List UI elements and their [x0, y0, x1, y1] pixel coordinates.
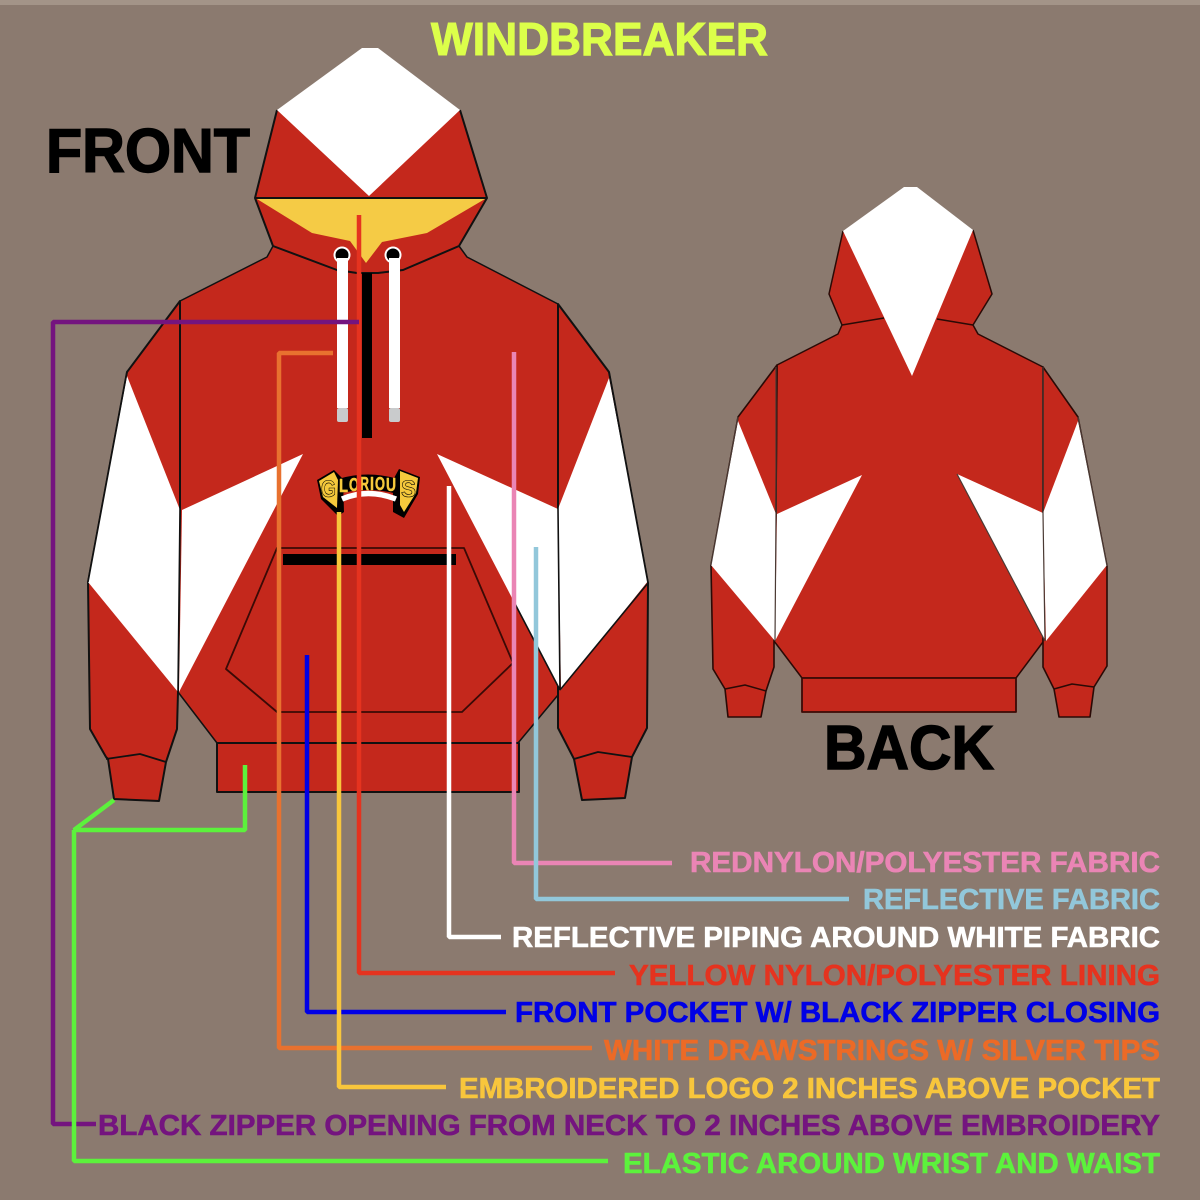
line: green: [74, 765, 245, 830]
embroidered logo: G: [321, 476, 336, 503]
left sleeve: [88, 301, 180, 801]
line: pink: [514, 352, 672, 863]
embroidered logo: R: [360, 474, 369, 494]
drawstring left: [337, 258, 348, 422]
embroidered logo: [317, 469, 420, 518]
heading: front: FRONT: [46, 117, 250, 186]
pocket: [226, 548, 513, 712]
right sleeve white panel: [558, 378, 648, 690]
callout lines: [53, 215, 849, 1161]
right body white panel: [437, 454, 560, 690]
yellow lining: [257, 199, 485, 263]
left sleeve white panel: [88, 376, 180, 692]
embroidered logo: L: [339, 476, 348, 496]
embroidered logo: I: [370, 474, 374, 494]
embroidered logo: U: [386, 475, 396, 495]
back left body white: [775, 475, 862, 641]
embroidered logo: S: [401, 476, 416, 503]
label: red fabric: REDNYLON/POLYESTER FABRIC: [690, 847, 1160, 879]
label: drawstrings: WHITE DRAWSTRINGS W/ SILVER TIPS: [604, 1035, 1160, 1067]
body: [178, 246, 558, 743]
back seams: [711, 367, 1107, 641]
back right sleeve white: [1043, 421, 1107, 641]
back right cuff: [1054, 684, 1094, 689]
line: green lower: [74, 830, 608, 1161]
hood white panel: [277, 48, 460, 196]
right sleeve: [558, 304, 648, 800]
left body white panel: [179, 454, 303, 692]
eyelet left: [334, 246, 350, 264]
hood opening line: [255, 197, 487, 199]
label: front pocket: FRONT POCKET W/ BLACK ZIPPER CLOSING: [515, 997, 1160, 1029]
line: yellow: [339, 512, 446, 1087]
back hood white panel: [843, 187, 973, 376]
line: white: [449, 486, 501, 937]
label: reflective piping: REFLECTIVE PIPING AROUND WHITE FABRIC: [512, 922, 1160, 954]
title: WINDBREAKER: [431, 13, 768, 65]
label: yellow lining: YELLOW NYLON/POLYESTER LINING: [629, 960, 1160, 992]
chest zipper: [362, 273, 372, 438]
label: elastic: ELASTIC AROUND WRIST AND WAIST: [623, 1148, 1161, 1180]
hood: [255, 110, 487, 273]
label: black zipper: BLACK ZIPPER OPENING FROM NECK TO 2 INCHES ABOVE EMBROIDERY: [98, 1110, 1160, 1142]
pocket zipper: [283, 554, 456, 565]
label: embroidered logo: EMBROIDERED LOGO 2 INCHES ABOVE POCKET: [459, 1073, 1161, 1105]
line: purple: [53, 322, 359, 1124]
label: reflective fabric: REFLECTIVE FABRIC: [863, 884, 1160, 916]
eyelet right: [384, 246, 402, 264]
sleeve outline on white: [88, 301, 648, 692]
back right sleeve: [1043, 367, 1107, 717]
right cuff: [574, 752, 632, 759]
heading: back: BACK: [824, 714, 994, 783]
back left sleeve white: [711, 421, 776, 641]
line: light blue: [536, 547, 849, 899]
back neck seam: [842, 318, 973, 325]
line: red: [359, 215, 615, 973]
back body: [774, 230, 1043, 678]
labels: [98, 847, 1161, 1180]
line: orange: [279, 353, 592, 1048]
back left cuff: [725, 685, 766, 691]
front hoodie: [88, 48, 648, 801]
back right body white: [957, 474, 1045, 641]
back hem: [802, 678, 1016, 712]
back left sleeve: [711, 365, 777, 717]
embroidered logo: O: [375, 474, 385, 494]
back hoodie: [711, 187, 1107, 717]
drawstring right: [389, 258, 400, 422]
line: blue: [307, 655, 506, 1012]
left cuff: [106, 754, 166, 762]
hem: [217, 743, 519, 792]
embroidered logo: O: [349, 475, 359, 495]
